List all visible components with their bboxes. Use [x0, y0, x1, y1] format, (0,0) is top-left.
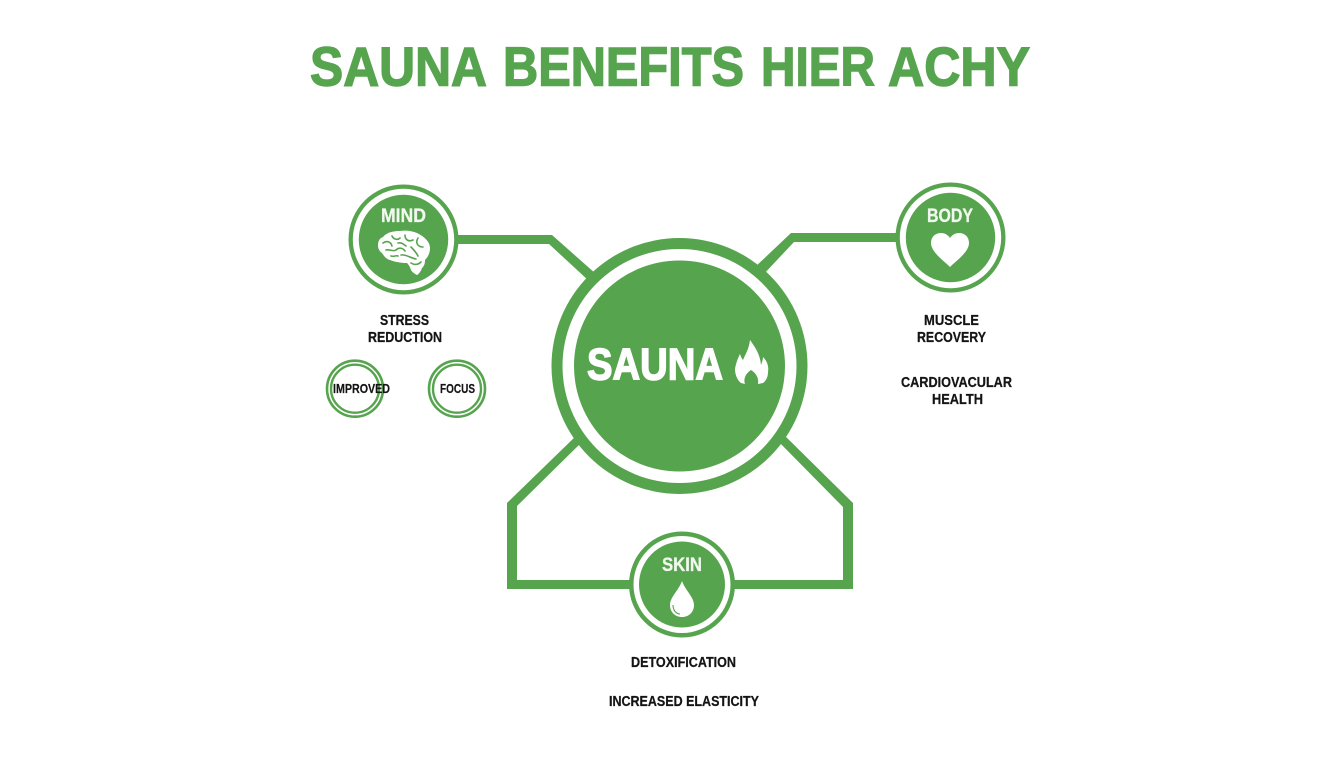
central node: sauna	[552, 238, 808, 494]
body benefit: cardiovascular health: HEALTH	[932, 392, 983, 408]
connector: sauna to skin, left	[507, 434, 632, 589]
connector: mind to sauna	[456, 235, 596, 281]
body benefit: muscle recovery	[917, 313, 986, 346]
body benefit: cardiovascular health: CARDIOVACULAR	[901, 375, 1012, 391]
connector: body to sauna	[753, 233, 897, 277]
title: SAUNA	[310, 36, 487, 98]
title: ACHY	[888, 36, 1030, 98]
skin benefit: detoxification: DETOXIFICATION	[631, 655, 736, 671]
icon: heart	[931, 233, 969, 267]
mind benefit: stress reduction: REDUCTION	[368, 330, 442, 346]
body benefit: cardiovascular health	[901, 375, 1012, 408]
body benefit: muscle recovery: MUSCLE	[924, 313, 979, 329]
node: skin	[629, 532, 735, 638]
mind benefit: improved	[327, 361, 390, 417]
icon: flame	[735, 340, 768, 384]
node: mind	[348, 184, 458, 294]
mind benefit: stress reduction	[368, 313, 442, 346]
sauna label: SAUNA	[587, 340, 723, 390]
connector: sauna to skin, right	[732, 432, 853, 589]
node: body	[896, 182, 1006, 292]
skin benefit: increased elasticity: INCREASED ELASTICITY	[609, 694, 759, 710]
icon: brain	[378, 231, 430, 275]
skin label: SKIN	[662, 554, 702, 576]
title: BENEFITS	[503, 36, 744, 98]
title	[310, 36, 1030, 98]
mind benefit: focus: FOCUS	[440, 381, 475, 396]
mind label: MIND	[381, 205, 426, 227]
mind benefit: focus	[429, 361, 485, 417]
body benefit: muscle recovery: RECOVERY	[917, 330, 986, 346]
body label: BODY	[927, 205, 973, 227]
icon: water drop	[670, 581, 694, 617]
title: HIER	[761, 36, 875, 98]
mind benefit: stress reduction: STRESS	[380, 313, 429, 329]
mind benefit: improved: IMPROVED	[333, 381, 390, 396]
